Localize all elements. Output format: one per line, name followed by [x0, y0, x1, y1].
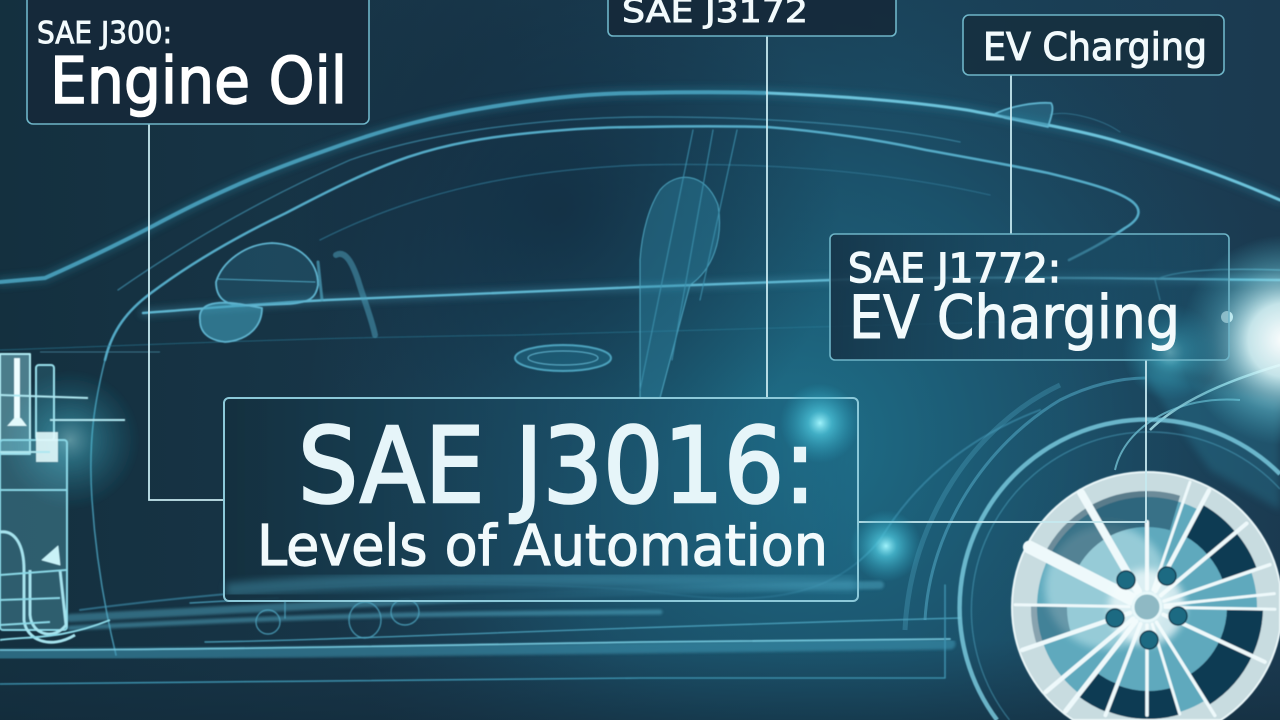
panel: SAE J1772: [830, 234, 1229, 360]
lug nuts: [1106, 567, 1187, 649]
roof line: [0, 92, 1280, 290]
label: SAE J1772: SAE J1772:: [848, 246, 1061, 292]
a-pillar and front door curve: [91, 360, 116, 655]
side mirror: [200, 243, 375, 342]
underbody parts: [190, 598, 419, 638]
door handle: [515, 345, 611, 371]
wheel hub: [1133, 593, 1161, 621]
shark fin antenna: [995, 103, 1053, 127]
label: SAE J300: SAE J300:: [37, 16, 172, 51]
panel: SAE J3172: [608, 0, 896, 36]
wheel: [960, 419, 1280, 720]
panel: SAE J3016: [224, 383, 922, 601]
sill lines: [0, 410, 1040, 684]
connector lines: [149, 36, 1146, 522]
engine wireframe: [0, 352, 160, 642]
panel: SAE J300: [27, 0, 369, 124]
text: Levels of Automation: Levels of Automation: [257, 514, 828, 579]
belt line: [0, 278, 1280, 350]
rim windows: [1049, 509, 1245, 705]
rear door accents: [1155, 269, 1280, 300]
window line: [105, 114, 1138, 360]
label: EV Charging: EV Charging: [983, 25, 1207, 69]
heading: EV Charging: EV Charging: [849, 283, 1180, 353]
heading: SAE J3016: SAE J3016:: [298, 405, 816, 527]
wheel spokes: [1015, 482, 1275, 716]
right side wheel arch and lamp glow: [905, 230, 1280, 630]
heading: Engine Oil: Engine Oil: [50, 45, 347, 119]
seat and b-pillar: [640, 130, 737, 398]
panel: EV Charging tag: [963, 15, 1224, 75]
rim face: [1012, 472, 1280, 720]
